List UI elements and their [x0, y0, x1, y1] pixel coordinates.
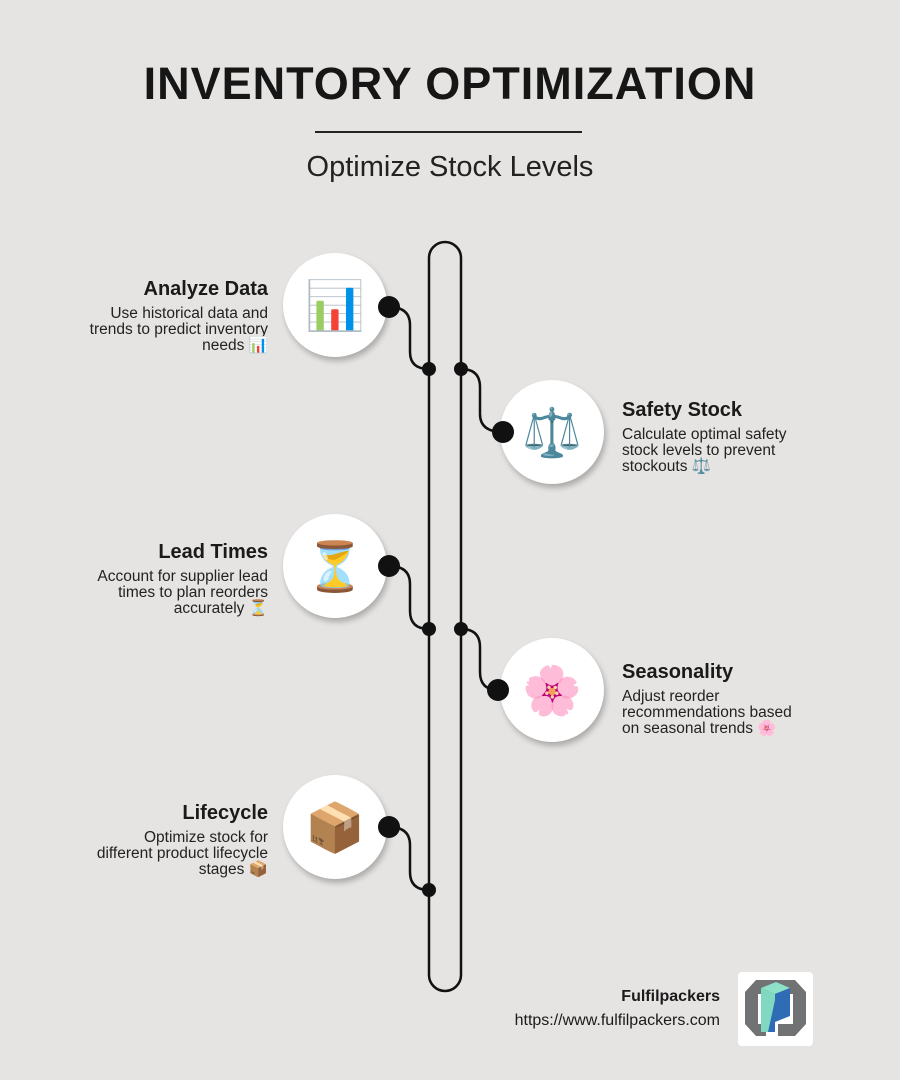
text: lifecycle: Optimize stock for [144, 829, 268, 846]
text: analyze data: trends to predict inventory [90, 321, 268, 338]
icon: scales circle [500, 380, 604, 484]
text: safety stock [622, 399, 787, 475]
connector dot: lead [378, 555, 400, 577]
text: lead times: Lead Times [158, 541, 268, 563]
text: analyze data: Use historical data and [110, 305, 268, 322]
icon: box circle: 📦 [305, 800, 365, 856]
text: lead times: times to plan reorders [118, 584, 268, 601]
text: safety stock: stock levels to prevent [622, 442, 775, 459]
text: lifecycle: stages 📦 [199, 861, 268, 878]
brand text: Fulfilpackers [621, 988, 720, 1005]
icon: hourglass circle [283, 514, 387, 618]
icon: bar chart circle: 📊 [305, 278, 365, 334]
text: seasonality: on seasonal trends 🌸 [622, 720, 777, 737]
brand text: https://www.fulfilpackers.com [515, 1012, 720, 1029]
text: analyze data: needs 📊 [202, 337, 268, 354]
brand text [515, 988, 720, 1029]
text: seasonality: recommendations based [622, 704, 792, 721]
text: safety stock: Calculate optimal safety [622, 426, 787, 443]
text: analyze data [90, 278, 268, 354]
title: INVENTORY OPTIMIZATION [144, 58, 756, 109]
text: safety stock: Safety Stock [622, 399, 742, 421]
icon: hourglass circle: ⏳ [305, 538, 365, 594]
text: seasonality: Adjust reorder [622, 688, 719, 705]
logo [738, 972, 813, 1046]
connector dot: lifecycle [378, 816, 400, 838]
icon: blossom circle [500, 638, 604, 742]
text: lifecycle: Lifecycle [182, 802, 268, 824]
icon: scales circle: ⚖️ [522, 404, 582, 460]
subtitle: Optimize Stock Levels [307, 151, 593, 183]
divider line [315, 131, 582, 133]
text: analyze data: Analyze Data [144, 278, 268, 300]
icon: bar chart circle [283, 253, 387, 357]
text: safety stock: stockouts ⚖️ [622, 458, 711, 475]
text: lead times: Account for supplier lead [97, 568, 268, 585]
text: lifecycle [97, 802, 268, 878]
text: lifecycle: different product lifecycle [97, 845, 268, 862]
icon: box circle [283, 775, 387, 879]
connector dot: analyze [378, 296, 400, 318]
connector dot: safety [492, 421, 514, 443]
text: seasonality [622, 661, 792, 737]
icon: blossom circle: 🌸 [522, 662, 582, 718]
text: lead times [97, 541, 268, 617]
text: lead times: accurately ⏳ [174, 600, 268, 617]
connector dot: seasonality [487, 679, 509, 701]
text: seasonality: Seasonality [622, 661, 733, 683]
